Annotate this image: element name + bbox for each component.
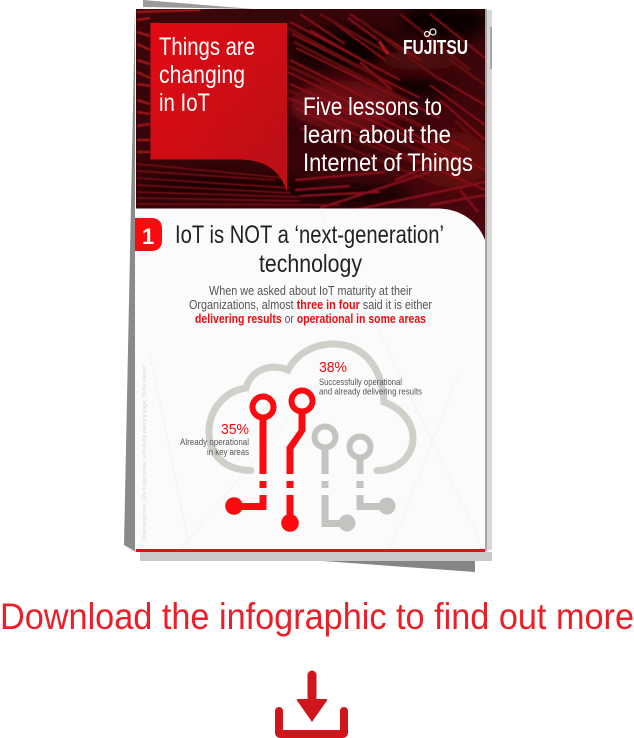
red title box bbox=[150, 23, 287, 192]
sheets behind the document bbox=[124, 0, 492, 572]
red circuit line 2 bbox=[281, 390, 312, 532]
title: things are changing in IoT: in IoT bbox=[159, 89, 210, 117]
cloud outline bbox=[209, 344, 413, 470]
callout: 38%: and already delivering results bbox=[319, 386, 422, 398]
title: things are changing in IoT: changing bbox=[159, 61, 245, 89]
number badge: 1 bbox=[142, 224, 154, 249]
logo: Fujitsu bbox=[403, 29, 468, 59]
intro text: When we asked about IoT maturity at their bbox=[209, 284, 412, 298]
number badge bbox=[135, 218, 162, 251]
subtitle: Internet of Things bbox=[303, 149, 473, 177]
section heading bbox=[175, 221, 444, 278]
intro text: Organizations, almost three in four said it is either bbox=[189, 298, 432, 312]
logo: Fujitsu: FUJITSU bbox=[403, 37, 468, 59]
callout: 38%: Successfully operational bbox=[319, 377, 402, 388]
red circuit line 1 bbox=[225, 396, 274, 515]
grey circuit line 4 bbox=[350, 436, 396, 514]
title: things are changing in IoT: Things are bbox=[159, 33, 255, 61]
icon: download arrow bbox=[275, 670, 348, 738]
callout: 38%: 38% bbox=[319, 360, 347, 376]
cloud circuit chart bbox=[180, 344, 422, 532]
callout: 35%: in key areas bbox=[207, 447, 249, 458]
subtitle: learn about the bbox=[303, 121, 451, 149]
decorative faint lines bbox=[150, 210, 480, 550]
footnote: Other responses: 16% In pilot phase; 10% At the planning stage; 1% No interest bbox=[142, 365, 148, 541]
document page bbox=[135, 4, 490, 552]
subtitle: Five lessons to bbox=[303, 93, 442, 121]
callout: 35%: Already operational bbox=[180, 437, 249, 448]
callout: 35% bbox=[180, 422, 249, 458]
section heading: IoT is NOT a ‘next-generation’ bbox=[175, 221, 444, 249]
callout: 38% bbox=[319, 360, 422, 398]
red bottom rule bbox=[136, 549, 485, 552]
white content panel bbox=[136, 208, 485, 549]
subtitle bbox=[303, 93, 473, 177]
section heading: technology bbox=[259, 250, 362, 278]
grey circuit line 3 bbox=[314, 426, 356, 532]
intro text bbox=[189, 284, 432, 326]
callout: 35%: 35% bbox=[221, 422, 249, 438]
hero background: red streaks bbox=[136, 4, 490, 245]
title: things are changing in IoT bbox=[159, 33, 255, 117]
intro text: delivering results or operational in some areas bbox=[195, 312, 426, 326]
